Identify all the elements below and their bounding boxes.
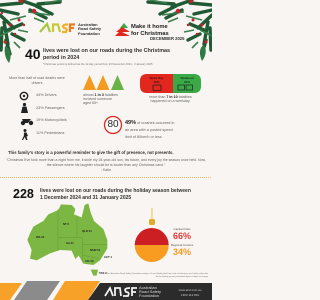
pine branches right: [148, 0, 212, 61]
footer bands: [0, 281, 212, 300]
header logo text: [78, 22, 101, 36]
campaign title: for Christmas: [131, 30, 169, 36]
drivers: 44% Drivers: [36, 93, 57, 97]
text: Capital Cities: [173, 226, 191, 230]
text: 34%: [173, 247, 191, 257]
80 speed sign: [104, 116, 122, 134]
holiday heading: 1 December 2024 and 31 January 2025: [40, 195, 131, 201]
footer logo text: Road Safety: [139, 289, 161, 294]
map labels: [36, 222, 112, 274]
story quote: - Katie: [101, 168, 111, 172]
story quote: [6, 158, 206, 172]
holiday heading: [40, 188, 191, 201]
speed statistic: [125, 120, 174, 139]
header logo text: Australian: [78, 22, 98, 27]
text: NSW 51: [90, 248, 100, 252]
header logo text: Road Safety: [78, 26, 101, 31]
big number 40: 40: [25, 46, 41, 62]
weekday text: [149, 94, 192, 103]
big number 228: 228: [13, 187, 34, 201]
text: NT 6: [63, 222, 69, 226]
speed statistic: 49% of crashes occurred in: [125, 120, 174, 126]
main heading: lives were lost on our roads during the Christmas: [43, 48, 170, 54]
weekend label: [180, 76, 194, 84]
main heading: [43, 48, 170, 61]
footer logo text: Foundation: [139, 293, 159, 298]
Australia map: [27, 203, 107, 276]
date: DECEMBER 2025: [150, 36, 184, 41]
footnote: *Christmas period is defined as the 12-day period from 23 December 2024 - 3 January 2025: [43, 63, 153, 66]
weekday / weekend box: [140, 74, 201, 93]
footer contact: 1300 113 843: [181, 293, 199, 297]
story heading: This family's story is a powerful reminder to give the gift of presence, not presents.: [8, 150, 174, 154]
text: TAS 9: [99, 270, 107, 274]
text: VIC 59: [85, 259, 94, 263]
story quote: "Christmas Eve took more than a night from me, it stole my 18-year-old son, his future, and every joy the season once held. Now, the silence where his laughter should be is louder than any Christmas carol.": [6, 158, 206, 167]
capital cities stat: [173, 226, 191, 241]
weekday label: 76%: [153, 80, 160, 84]
weekday text: happened on a weekday.: [151, 99, 190, 103]
motorcyclists: 19% Motorcyclists: [36, 118, 67, 122]
source note: The Australian Road Safety Foundation analysis of road fatality data from state and territory road safety authorities for the holiday period, provisional figures subject to change: [107, 273, 208, 278]
holiday heading: lives were lost on our roads during the holiday season between: [40, 188, 191, 194]
text: 66%: [173, 231, 191, 241]
icon: motorcycle: [21, 119, 33, 125]
weekday label: Week Day: [149, 76, 164, 80]
dotted divider: [0, 176, 212, 178]
text: SA 21: [66, 241, 74, 245]
pedestrians: 11% Pedestrians: [36, 131, 64, 135]
seniors text: [83, 92, 118, 105]
pine branches left: [0, 0, 62, 63]
Christmas tree logo: [115, 23, 130, 36]
speed statistic: limit of 80km/h or less: [125, 135, 162, 139]
regional stat: [171, 242, 194, 257]
text: QLD 51: [82, 228, 92, 232]
icon: pedestrian: [22, 129, 28, 140]
decorative graphics: [0, 0, 212, 300]
passengers: 23% Passengers: [36, 106, 65, 110]
icon: steering wheel: [20, 92, 28, 100]
ARSF logo: [40, 24, 75, 32]
footer logo text: [139, 284, 161, 298]
speed sign number: 80: [107, 118, 119, 130]
seniors text: almost 1 in 3 fatalities: [83, 92, 118, 96]
campaign title: Make it home: [131, 24, 168, 30]
speed statistic: an area with a posted speed: [125, 128, 173, 132]
weekend label: Weekend: [180, 76, 194, 80]
weekday label: [149, 76, 164, 84]
weekday text: more than 7 in 10 fatalities: [149, 94, 192, 98]
weekend label: 24%: [184, 80, 190, 84]
road users panel: More than half of road deaths were drivers: [9, 76, 65, 85]
icons: trees: [83, 75, 124, 90]
text: ACT 1: [104, 254, 112, 258]
footer contact: www.arsf.com.au: [179, 288, 201, 292]
bauble: [135, 208, 169, 262]
footer logo: [105, 288, 137, 296]
campaign title: [131, 24, 169, 36]
seniors text: aged 65+: [83, 101, 98, 105]
text: Regional Centres: [171, 242, 193, 246]
icon: passenger: [21, 103, 28, 113]
footer contact: [178, 288, 202, 297]
main heading: period in 2024: [43, 55, 79, 61]
header logo text: Foundation: [78, 31, 100, 36]
seniors text: involved someone: [83, 97, 112, 101]
text: WA 34: [36, 235, 44, 239]
footer logo text: Australian: [139, 284, 157, 290]
